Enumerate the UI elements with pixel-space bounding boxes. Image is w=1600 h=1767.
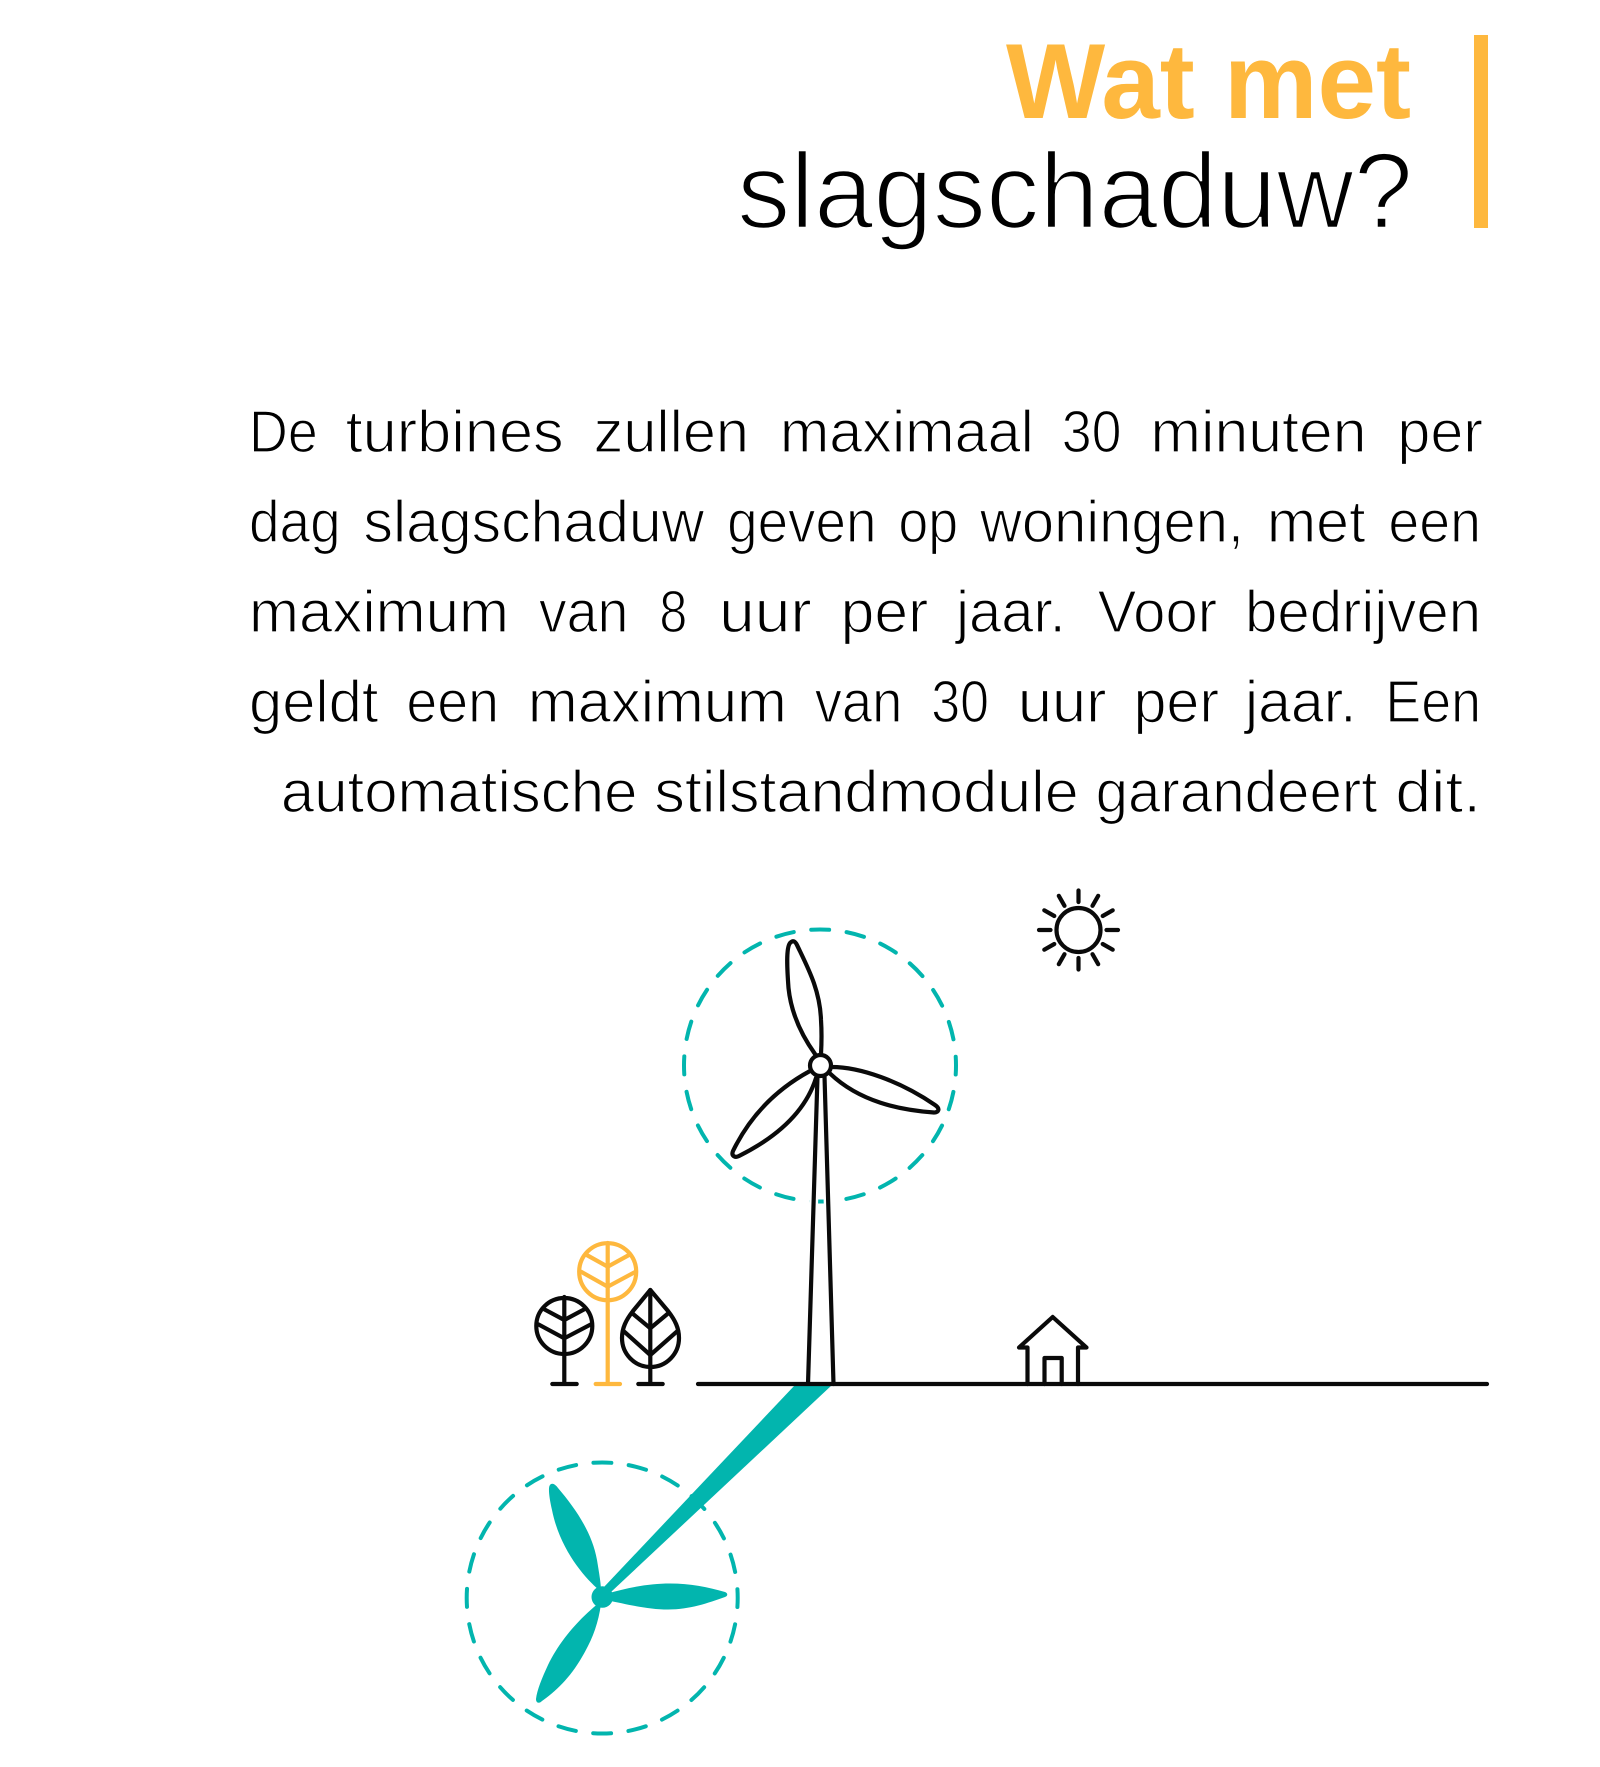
ground xyxy=(698,1382,1487,1386)
shadow hub xyxy=(592,1586,613,1608)
body text: per xyxy=(1397,400,1483,465)
shadow of turbine xyxy=(536,1385,832,1703)
body text: van xyxy=(539,580,628,645)
shadow blades xyxy=(536,1484,727,1703)
body text: De xyxy=(249,400,318,465)
wind turbine xyxy=(732,941,938,1384)
body text: jaar. xyxy=(954,580,1066,645)
body text: dag xyxy=(249,490,341,555)
body text: minuten xyxy=(1150,400,1367,465)
icon: black leaf tree xyxy=(622,1290,679,1384)
body text: maximum xyxy=(249,580,509,645)
turbine blades xyxy=(732,941,938,1157)
body text: met xyxy=(1267,490,1366,555)
title accent bar xyxy=(1474,35,1488,228)
title line: Wat met: Wat met xyxy=(1006,21,1411,141)
body text: per xyxy=(1133,670,1219,735)
body text: Een xyxy=(1385,670,1481,735)
body text: garandeert xyxy=(1096,760,1377,825)
body text: automatische xyxy=(281,760,637,825)
body text: 30 xyxy=(931,670,989,735)
body text: op xyxy=(898,490,958,555)
body text: uur xyxy=(1018,670,1107,735)
body text: uur xyxy=(719,580,812,645)
turbine hub xyxy=(810,1055,831,1076)
body text: 30 xyxy=(1062,400,1121,465)
body text: Voor xyxy=(1098,580,1217,645)
body text: slagschaduw xyxy=(364,490,705,555)
body text: woningen, xyxy=(979,490,1244,555)
body text: geven xyxy=(727,490,876,555)
body text: dit. xyxy=(1395,760,1481,825)
body text: zullen xyxy=(594,400,749,465)
title line: slagschaduw?: slagschaduw? xyxy=(737,130,1413,251)
icon: orange round tree xyxy=(579,1243,636,1384)
body text: geldt xyxy=(249,670,378,735)
icon: sun xyxy=(1039,890,1118,970)
body text: per xyxy=(841,580,928,645)
icon: house xyxy=(1019,1317,1086,1384)
body text: stilstandmodule xyxy=(654,760,1079,825)
dashed rotor circle: turbine xyxy=(684,930,956,1202)
icon: black round tree xyxy=(536,1297,592,1384)
tower shadow xyxy=(604,1385,832,1592)
body text: maximaal xyxy=(780,400,1034,465)
body text: een xyxy=(406,670,499,735)
body text: bedrijven xyxy=(1245,580,1481,645)
body text: maximum xyxy=(528,670,787,735)
body text: 8 xyxy=(659,580,687,645)
dashed rotor circle: shadow xyxy=(467,1462,738,1734)
body text: turbines xyxy=(346,400,564,465)
body text xyxy=(249,400,1483,825)
body text: een xyxy=(1388,490,1481,555)
body text: jaar. xyxy=(1243,670,1357,735)
body text: van xyxy=(815,670,902,735)
turbine tower xyxy=(808,1076,834,1384)
title xyxy=(737,21,1413,251)
